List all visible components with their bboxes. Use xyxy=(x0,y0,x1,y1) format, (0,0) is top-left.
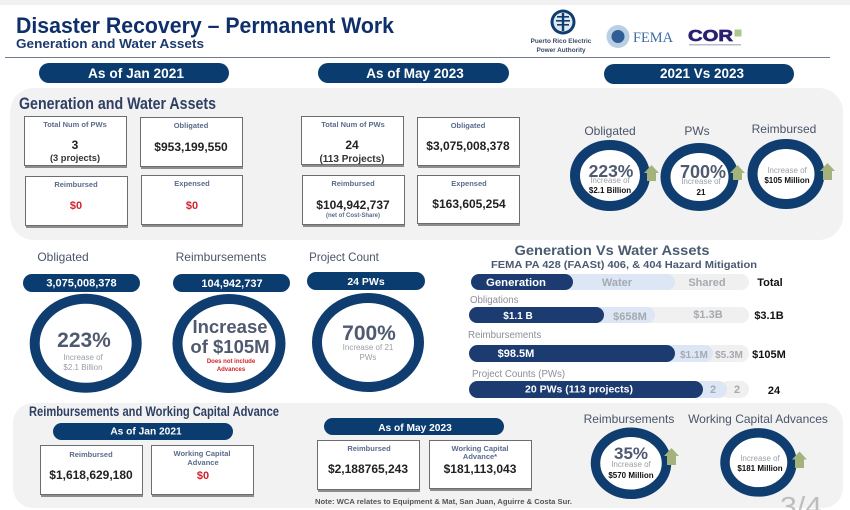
legend row: Water xyxy=(602,277,633,289)
bar: obligations: Obligations xyxy=(470,295,519,306)
panel: generation and water assets xyxy=(10,88,843,240)
card: reimbursed Jan 2021: Reimbursed xyxy=(69,450,113,459)
bar: project counts: 2 xyxy=(710,384,716,396)
donut: 700%: Increase of 21 xyxy=(343,343,394,352)
pill: project count value: 24 PWs xyxy=(347,276,385,288)
section: project count xyxy=(307,252,425,387)
card: WCA May 2023: Advance* xyxy=(463,452,497,461)
legend row: Total xyxy=(757,277,783,289)
card: expensed 2023: Expensed xyxy=(451,179,487,188)
icon: up arrow xyxy=(664,448,679,465)
pill: As of Jan 2021: As of Jan 2021 xyxy=(88,66,184,81)
pill: as of Jan 2021 xyxy=(53,423,233,440)
logo: FEMA: FEMA xyxy=(633,30,673,46)
bar: reimbursements: $5.3M xyxy=(715,350,743,361)
section: obligated xyxy=(23,250,140,388)
card: obligated 2021: $953,199,550 xyxy=(154,140,228,154)
bar: obligations: $1.3B xyxy=(693,309,723,321)
pill: 2021 Vs 2023: 2021 Vs 2023 xyxy=(660,66,745,81)
card: reimbursed May 2023 xyxy=(318,440,420,492)
donut: 223%: $2.1 Billion xyxy=(63,363,103,372)
donut: obligated: Obligated xyxy=(584,124,636,138)
bar: reimbursements: $105M xyxy=(752,349,786,361)
bar: reimbursements: Reimbursements xyxy=(468,330,541,341)
donut: 700%: 700% xyxy=(342,322,396,345)
donut: PWs: PWs xyxy=(684,124,710,138)
donut: PWs: 21 xyxy=(697,188,706,197)
section: reimbursements: Reimbursements xyxy=(176,250,266,264)
donut: working capital advances: $181 Million xyxy=(737,464,783,473)
card: reimbursed 2023: Reimbursed xyxy=(331,179,375,188)
bar: obligations: $3.1B xyxy=(754,310,784,322)
card: WCA May 2023 xyxy=(430,440,532,491)
pill: reimbursements value: 104,942,737 xyxy=(201,278,263,290)
donut: increase of $105M: of $105M xyxy=(190,336,270,357)
subtitle: Generation and Water Assets xyxy=(16,37,204,51)
card: WCA Jan 2021: $0 xyxy=(197,470,209,482)
legend row: Shared xyxy=(688,277,726,289)
donut: obligated: 223% xyxy=(589,161,634,181)
card: reimbursed 2023 xyxy=(302,176,405,227)
bar: reimbursements: $98.5M xyxy=(498,348,534,360)
donut: obligated: Increase of xyxy=(590,176,631,185)
card: reimbursed 2021: $0 xyxy=(70,200,82,212)
logo: Puerto Rico Electric Power Authority xyxy=(531,10,592,54)
donut: 223%: 223% xyxy=(57,329,111,352)
bar: obligations xyxy=(469,295,784,323)
donut: PWs: 700% xyxy=(680,162,726,182)
card: WCA May 2023: $181,113,043 xyxy=(444,462,517,476)
donut: 700% xyxy=(317,298,419,387)
note: Note: WCA relates to Equipment & Mat, San Juan, Aguirre & Costa Sur. xyxy=(315,497,572,506)
pill: obligated value: 3,075,008,378 xyxy=(46,278,117,290)
donut: reimbursed: Increase of xyxy=(767,166,808,175)
card: WCA May 2023: Working Capital xyxy=(452,444,508,453)
logo: COR3: COR xyxy=(688,28,734,45)
bar: project counts xyxy=(469,369,781,398)
donut: increase of $105M xyxy=(178,299,280,388)
donut: 700%: PWs xyxy=(360,353,376,362)
legend row: Generation xyxy=(486,277,546,289)
bar: project counts: Project Counts (PWs) xyxy=(472,369,565,380)
card: expensed 2023 xyxy=(418,176,520,226)
card: expensed 2021 xyxy=(142,176,243,227)
logo: FEMA xyxy=(606,25,673,48)
card: total PWs 2021 xyxy=(24,116,127,168)
donut: PWs: Increase of xyxy=(681,177,722,186)
card: reimbursed 2023: $104,942,737 xyxy=(316,198,390,212)
logo: COR3 xyxy=(688,28,742,46)
panel: reimbursements and working capital advance xyxy=(13,403,843,508)
bar: reimbursements xyxy=(468,330,786,362)
pill: As of Jan 2021 xyxy=(39,63,229,83)
donut: working capital advances: Increase of xyxy=(740,454,781,463)
card: obligated 2023: $3,075,008,378 xyxy=(426,139,510,153)
card: total PWs 2021: Total Num of PWs xyxy=(43,120,107,129)
donut: increase of $105M: Does not include xyxy=(207,359,256,365)
donut: PWs xyxy=(666,124,734,206)
donut: obligated xyxy=(575,124,645,206)
card: total PWs 2021: (3 projects) xyxy=(50,153,100,163)
card: WCA Jan 2021: Advance xyxy=(187,458,219,467)
icon: up arrow xyxy=(820,163,835,180)
card: reimbursed 2023: (net of Cost-Share) xyxy=(326,213,380,219)
donut: increase of $105M: Advances xyxy=(217,367,246,373)
section: reimbursements xyxy=(173,250,290,388)
donut: reimbursements 35% xyxy=(584,412,674,494)
bar: project counts: 24 xyxy=(768,385,781,397)
bar: obligations: $1.1 B xyxy=(503,311,533,322)
pill: as of Jan 2021: As of Jan 2021 xyxy=(110,426,182,438)
card: reimbursed 2021: Reimbursed xyxy=(54,180,98,189)
card: obligated 2021: Obligated xyxy=(174,121,209,130)
section: project count: Project Count xyxy=(309,252,380,264)
title: Disaster Recovery – Permanent Work xyxy=(16,13,395,38)
donut: reimbursed xyxy=(752,122,820,204)
chart: generation vs water assets xyxy=(468,242,786,398)
donut: reimbursements 35%: Increase of xyxy=(611,460,652,469)
bar: obligations: $658M xyxy=(613,311,647,323)
card: reimbursed Jan 2021 xyxy=(40,446,143,497)
icon: up arrow xyxy=(730,165,745,180)
legend row xyxy=(471,274,783,290)
heading: Reimbursements and Working Capital Advance xyxy=(29,404,279,419)
card: reimbursed Jan 2021: $1,618,629,180 xyxy=(49,468,133,482)
card: total PWs 2021: 3 xyxy=(72,138,79,152)
donut: reimbursements 35%: 35% xyxy=(614,444,648,463)
donut: increase of $105M: Increase xyxy=(192,316,268,337)
card: total PWs 2023: Total Num of PWs xyxy=(321,120,385,129)
card: total PWs 2023: (113 Projects) xyxy=(319,154,385,165)
card: expensed 2021: Expensed xyxy=(174,179,210,188)
logo: Puerto Rico Electric Power Authority: Power Authority xyxy=(536,47,586,54)
heading: Generation and Water Assets xyxy=(19,95,216,113)
pill: As of May 2023: As of May 2023 xyxy=(366,66,464,81)
donut: reimbursed: $105 Million xyxy=(764,176,810,185)
pill: as of May 2023: As of May 2023 xyxy=(378,423,452,434)
chart heading: Generation Vs Water Assets xyxy=(514,242,710,258)
card: obligated 2021 xyxy=(140,118,243,169)
donut: 223% xyxy=(35,299,137,388)
card: total PWs 2023: 24 xyxy=(345,138,359,152)
donut: reimbursements 35%: $570 Million xyxy=(608,471,654,480)
chart subheading: FEMA PA 428 (FAASt) 406, & 404 Hazard Mitigation xyxy=(491,260,757,271)
donut: reimbursed: Reimbursed xyxy=(752,122,816,136)
section: obligated: Obligated xyxy=(37,250,89,264)
donut: working capital advances xyxy=(688,412,828,492)
card: expensed 2023: $163,605,254 xyxy=(432,197,506,211)
pill: 2021 Vs 2023 xyxy=(604,64,794,84)
donut: obligated: $2.1 Billion xyxy=(589,186,631,195)
pill: as of May 2023 xyxy=(324,418,504,435)
donut: working capital advances: Working Capital Advances xyxy=(688,412,828,426)
bar: reimbursements: $1.1M xyxy=(680,350,708,361)
card: expensed 2021: $0 xyxy=(186,200,198,212)
card: reimbursed May 2023: $2,188765,243 xyxy=(328,462,408,476)
card: reimbursed May 2023: Reimbursed xyxy=(347,444,391,453)
donut: 223%: Increase of xyxy=(63,353,104,362)
card: total PWs 2023 xyxy=(302,116,404,167)
card: obligated 2023: Obligated xyxy=(451,121,486,130)
donut: reimbursements 35%: Reimbursements xyxy=(584,412,674,426)
bar: project counts: 2 xyxy=(734,384,740,396)
card: WCA Jan 2021: Working Capital xyxy=(174,449,230,458)
card: reimbursed 2021 xyxy=(26,176,128,228)
icon: up arrow xyxy=(644,165,659,181)
card: obligated 2023 xyxy=(418,118,520,168)
pill: As of May 2023 xyxy=(318,63,509,83)
logo: Puerto Rico Electric Power Authority: Puerto Rico Electric xyxy=(531,38,592,45)
icon: up arrow xyxy=(792,452,807,468)
bar: project counts: 20 PWs (113 projects) xyxy=(525,384,633,396)
card: WCA Jan 2021 xyxy=(152,446,254,497)
